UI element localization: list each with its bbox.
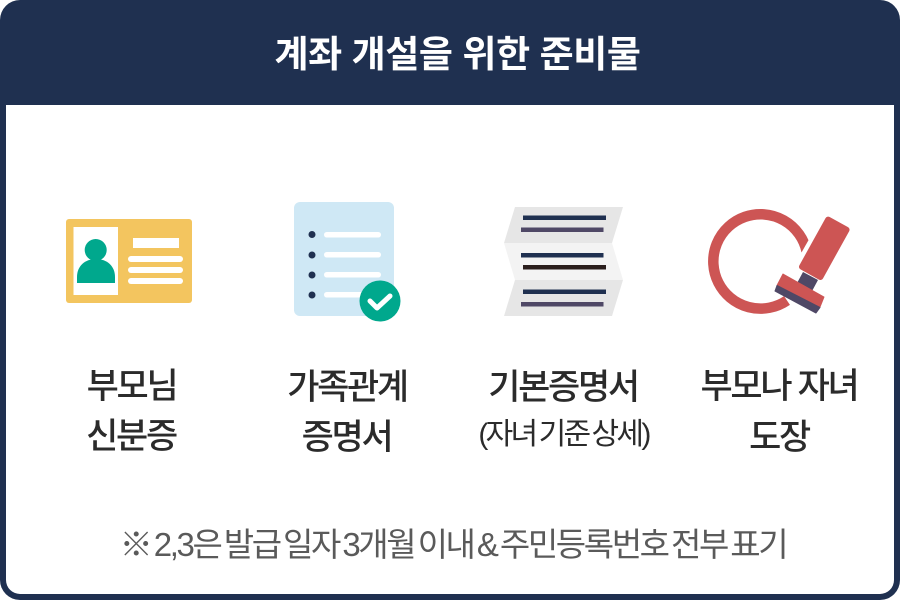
icon: folded certificate	[504, 207, 623, 316]
icon: seal stamp	[713, 214, 851, 313]
label: parent ID line 2: 신분증	[86, 417, 176, 456]
label: parent ID line 1: 부모님	[87, 367, 176, 406]
label: basic certificate note: (자녀 기준 상세)	[478, 418, 649, 451]
icon: ID card	[66, 219, 192, 303]
footnote: ※ 2,3은 발급 일자 3개월 이내 & 주민등록번호 전부 표기	[120, 526, 786, 563]
label: stamp line 2: 도장	[749, 418, 809, 457]
label: family relation line 2: 증명서	[302, 418, 391, 457]
title: 계좌 개설을 위한 준비물	[274, 34, 641, 75]
label: basic certificate: 기본증명서	[488, 368, 638, 407]
icon: checklist document	[294, 202, 400, 322]
label: stamp line 1: 부모나 자녀	[701, 367, 857, 406]
label: family relation line 1: 가족관계	[287, 368, 407, 407]
